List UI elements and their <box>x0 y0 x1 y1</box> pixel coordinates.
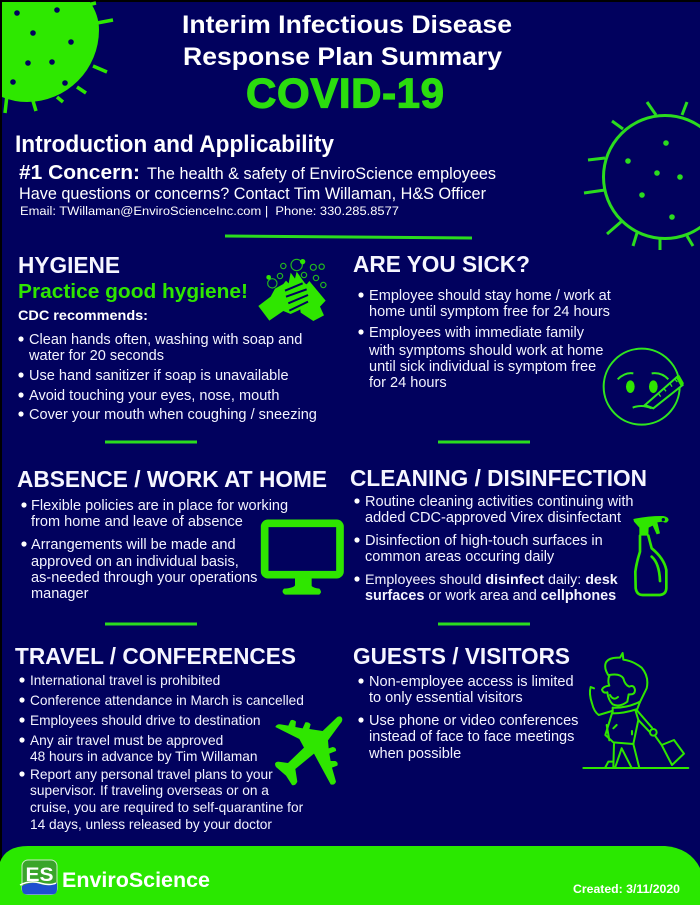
title: Response Plan Summary <box>183 43 502 71</box>
heading: introduction: Introduction and Applicability <box>15 131 335 158</box>
list: travel bullets: Report any personal travel plans to your <box>30 767 273 782</box>
list: hygiene bullets <box>18 332 317 423</box>
list: guests bullets: Non-employee access is limited <box>369 674 574 690</box>
panel: introduction and applicability <box>15 131 496 218</box>
panel: absence / work at home <box>17 466 340 602</box>
icon: airplane <box>275 716 342 785</box>
subheading: practice good hygiene: Practice good hygiene! <box>18 280 248 303</box>
text: number one concern: The health & safety of EnviroScience employees <box>147 165 496 183</box>
list: travel bullets: Employees should drive to destination <box>30 713 261 728</box>
list: cleaning bullets: common areas occuring daily <box>365 549 555 565</box>
list: travel bullets <box>19 673 304 832</box>
panel: hygiene <box>18 252 326 423</box>
icon: filled virus top left <box>2 2 113 113</box>
icon: outline virus top right <box>584 102 700 250</box>
text: CDC recommends: CDC recommends: <box>18 308 148 323</box>
list: travel bullets: cruise, you are required to self-quarantine for <box>30 800 304 815</box>
title <box>182 11 512 116</box>
list: cleaning bullets: Routine cleaning activities continuing with <box>365 494 633 510</box>
title: COVID-19: COVID-19 <box>246 70 444 116</box>
icon: washing hands <box>258 259 326 321</box>
list: absence bullets <box>21 498 288 602</box>
list: sick bullets: Employee should stay home / work at <box>369 288 611 304</box>
heading: travel: TRAVEL / CONFERENCES <box>15 643 296 669</box>
list: cleaning bullets: surfaces or work area and cellphones <box>365 588 616 604</box>
list: hygiene bullets: water for 20 seconds <box>28 348 164 364</box>
text: contact: Have questions or concerns? Contact Tim Willaman, H&S Officer <box>19 185 486 203</box>
list: guests bullets: instead of face to face meetings <box>369 729 574 745</box>
list: hygiene bullets: Use hand sanitizer if soap is unavailable <box>29 368 289 384</box>
list: travel bullets: Conference attendance in March is cancelled <box>30 693 304 708</box>
heading: hygiene: HYGIENE <box>18 252 120 278</box>
list: sick bullets: Employees with immediate family <box>369 325 585 341</box>
list: cleaning bullets <box>354 494 633 604</box>
panel: travel / conferences <box>15 643 342 832</box>
heading: guests: GUESTS / VISITORS <box>353 643 570 669</box>
list: absence bullets: from home and leave of absence <box>31 514 243 530</box>
list: sick bullets: until sick individual is symptom free <box>369 359 596 375</box>
list: sick bullets: home until symptom free for 24 hours <box>369 304 610 320</box>
icon: face with thermometer <box>604 349 684 425</box>
heading: cleaning: CLEANING / DISINFECTION <box>350 465 647 491</box>
text: email and phone: Email: TWillaman@EnviroScienceInc.com | Phone: 330.285.8577 <box>20 204 399 218</box>
text: number one concern: #1 Concern: <box>19 162 140 184</box>
list: sick bullets <box>358 288 611 391</box>
logo: wordmark: EnviroScience <box>62 869 210 892</box>
list: travel bullets: 48 hours in advance by Tim Willaman <box>30 749 257 764</box>
list: absence bullets: Arrangements will be made and <box>31 537 236 553</box>
list: hygiene bullets: Avoid touching your eyes, nose, mouth <box>29 388 279 404</box>
list: hygiene bullets: Clean hands often, washing with soap and <box>29 332 302 348</box>
list: cleaning bullets: Employees should disinfect daily: desk <box>365 572 618 588</box>
list: sick bullets: for 24 hours <box>369 375 447 391</box>
text: created date: Created: 3/11/2020 <box>573 882 680 896</box>
logo: EnviroScience mark <box>20 860 57 894</box>
text: number one concern <box>19 162 496 184</box>
icon: spray bottle <box>633 516 669 595</box>
panel: cleaning / disinfection <box>350 465 669 604</box>
icon: computer monitor <box>265 523 340 595</box>
title: Interim Infectious Disease <box>182 11 512 39</box>
list: absence bullets: Flexible policies are in place for working <box>31 498 288 514</box>
list: cleaning bullets: added CDC-approved Virex disinfectant <box>365 510 621 526</box>
list: hygiene bullets: Cover your mouth when coughing / sneezing <box>29 407 317 423</box>
panel: are you sick <box>353 251 684 425</box>
list: guests bullets <box>358 674 578 762</box>
icon: traveler with suitcase <box>583 653 688 768</box>
list: absence bullets: approved on an individual basis, <box>31 554 239 570</box>
list: guests bullets: to only essential visitors <box>369 690 523 706</box>
logo: EnviroScience mark: ES <box>26 865 54 886</box>
list: travel bullets: 14 days, unless released by your doctor <box>30 817 272 832</box>
list: guests bullets: when possible <box>368 746 461 762</box>
list: travel bullets: supervisor. If traveling overseas or on a <box>30 783 269 798</box>
panel: guests / visitors <box>353 643 688 768</box>
list: absence bullets: manager <box>31 586 89 602</box>
list: guests bullets: Use phone or video conferences <box>369 713 578 729</box>
footer band <box>0 846 700 905</box>
heading: are you sick: ARE YOU SICK? <box>353 251 530 277</box>
list: travel bullets: International travel is prohibited <box>30 673 220 688</box>
list: travel bullets: Any air travel must be approved <box>30 733 223 748</box>
heading: absence: ABSENCE / WORK AT HOME <box>17 466 327 492</box>
list: absence bullets: as-needed through your operations <box>31 570 257 586</box>
list: cleaning bullets: Disinfection of high-touch surfaces in <box>365 533 603 549</box>
list: sick bullets: with symptoms should work at home <box>368 343 603 359</box>
